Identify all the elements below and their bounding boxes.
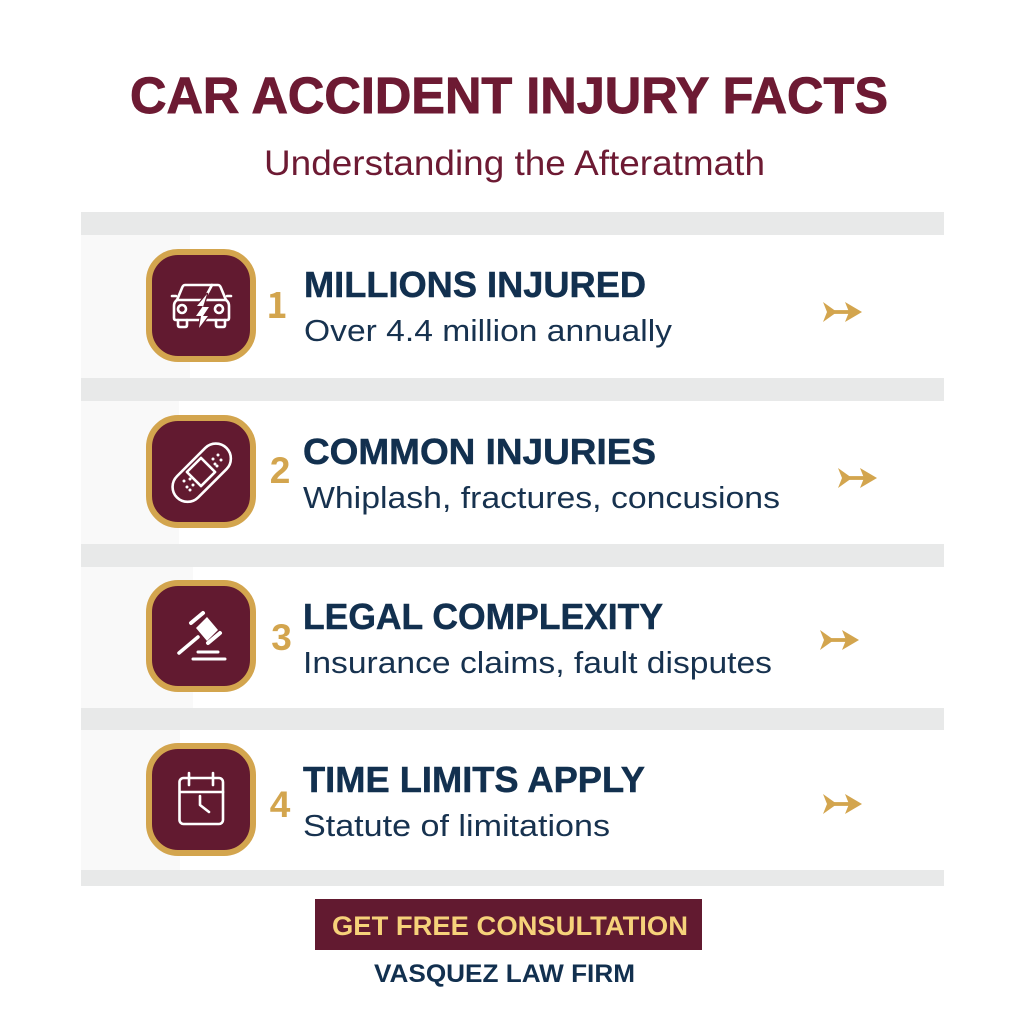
icon: bandage: [149, 418, 253, 525]
arrow: [820, 630, 859, 650]
step number 2: 2: [270, 450, 290, 491]
heading: TIME LIMITS APPLY: [303, 759, 645, 800]
subtitle: Understanding the Afteratmath: [264, 144, 765, 183]
description: Whiplash, fractures, concusions: [303, 480, 780, 515]
call to action button: [315, 899, 702, 950]
heading: MILLIONS INJURED: [304, 264, 646, 305]
row 1: millions injured: [149, 252, 862, 359]
heading: LEGAL COMPLEXITY: [303, 596, 663, 637]
description: Insurance claims, fault disputes: [303, 645, 772, 680]
arrow: [823, 794, 862, 814]
call to action button: GET FREE CONSULTATION: [332, 911, 688, 941]
icon: calendar: [149, 746, 253, 853]
description: Statute of limitations: [303, 808, 610, 843]
step number 3: 3: [271, 617, 292, 658]
title: CAR ACCIDENT INJURY FACTS: [130, 67, 888, 124]
row 4: time limits: [149, 746, 862, 853]
firm name: VASQUEZ LAW FIRM: [374, 960, 635, 988]
row 2: common injuries: [149, 418, 877, 525]
arrow: [838, 468, 877, 488]
panel: fact list: [81, 212, 944, 886]
step number 4: 4: [270, 784, 291, 825]
arrow: [823, 302, 862, 322]
step number 1: 1: [266, 277, 288, 329]
icon: gavel: [149, 583, 253, 689]
description: Over 4.4 million annually: [304, 313, 673, 348]
icon: car crash: [149, 252, 253, 359]
heading: COMMON INJURIES: [303, 431, 656, 472]
row 3: legal complexity: [149, 583, 859, 689]
